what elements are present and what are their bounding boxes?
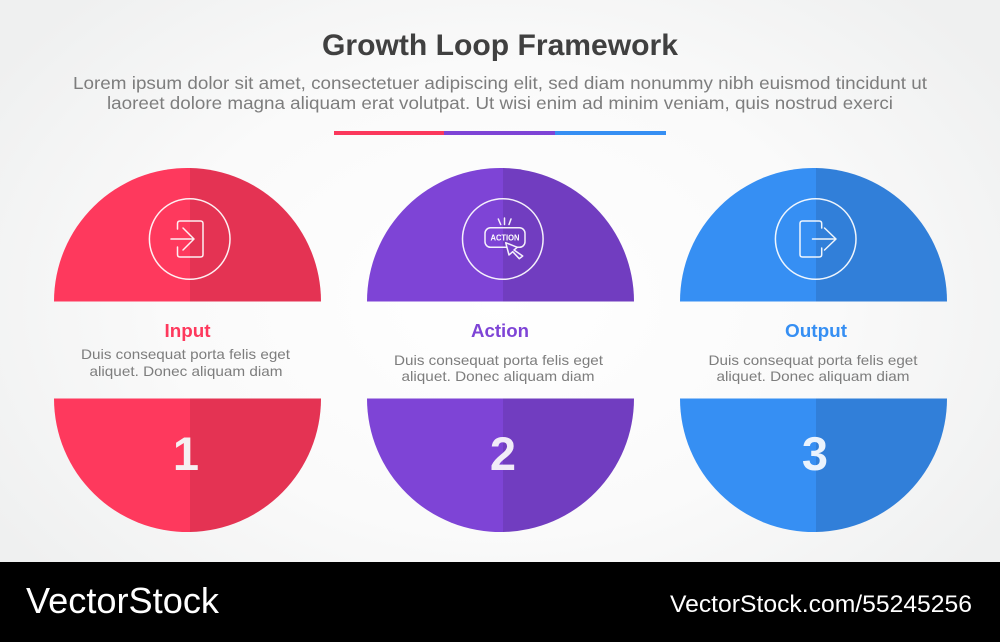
icon: action button [462, 199, 543, 279]
icon: enter door [149, 199, 230, 279]
action heading: Action [471, 321, 529, 341]
action bottom half circle [367, 398, 634, 532]
input text: aliquet. Donec aliquam diam [90, 364, 282, 379]
input bottom half circle [54, 398, 321, 532]
input heading: Input [164, 321, 211, 341]
number 3: 3 [802, 427, 828, 480]
action top half circle [367, 168, 634, 302]
panel: action [367, 168, 634, 532]
tricolor divider [334, 131, 666, 135]
watermark bar [0, 562, 1000, 642]
icon: exit door [775, 199, 856, 279]
number 2: 2 [490, 427, 516, 480]
action text: aliquet. Donec aliquam diam [402, 369, 594, 384]
input text [81, 347, 290, 379]
description text: Lorem ipsum dolor sit amet, consectetuer adipiscing elit, sed diam nonummy nibh euismod tincidunt ut [73, 73, 927, 93]
output text [708, 353, 918, 384]
panel: input [54, 168, 321, 532]
description text: laoreet dolore magna aliquam erat volutpat. Ut wisi enim ad minim veniam, quis nostrud exerci [107, 93, 893, 113]
output top half circle [680, 168, 947, 302]
watermark url: VectorStock.com/55245256 [670, 591, 972, 618]
number 1: 1 [173, 427, 199, 480]
input top half circle [54, 168, 321, 302]
description text [73, 73, 927, 113]
icon: action button: ACTION [490, 233, 520, 243]
panel: output [680, 168, 947, 532]
watermark logo: VectorStock [26, 580, 220, 621]
action text [394, 353, 603, 384]
title: Growth Loop Framework [322, 29, 678, 62]
action text: Duis consequat porta felis eget [394, 353, 603, 368]
output bottom half circle [680, 398, 947, 532]
output text: aliquet. Donec aliquam diam [716, 369, 910, 384]
output heading: Output [785, 321, 847, 341]
output text: Duis consequat porta felis eget [708, 353, 918, 368]
input text: Duis consequat porta felis eget [81, 347, 290, 362]
